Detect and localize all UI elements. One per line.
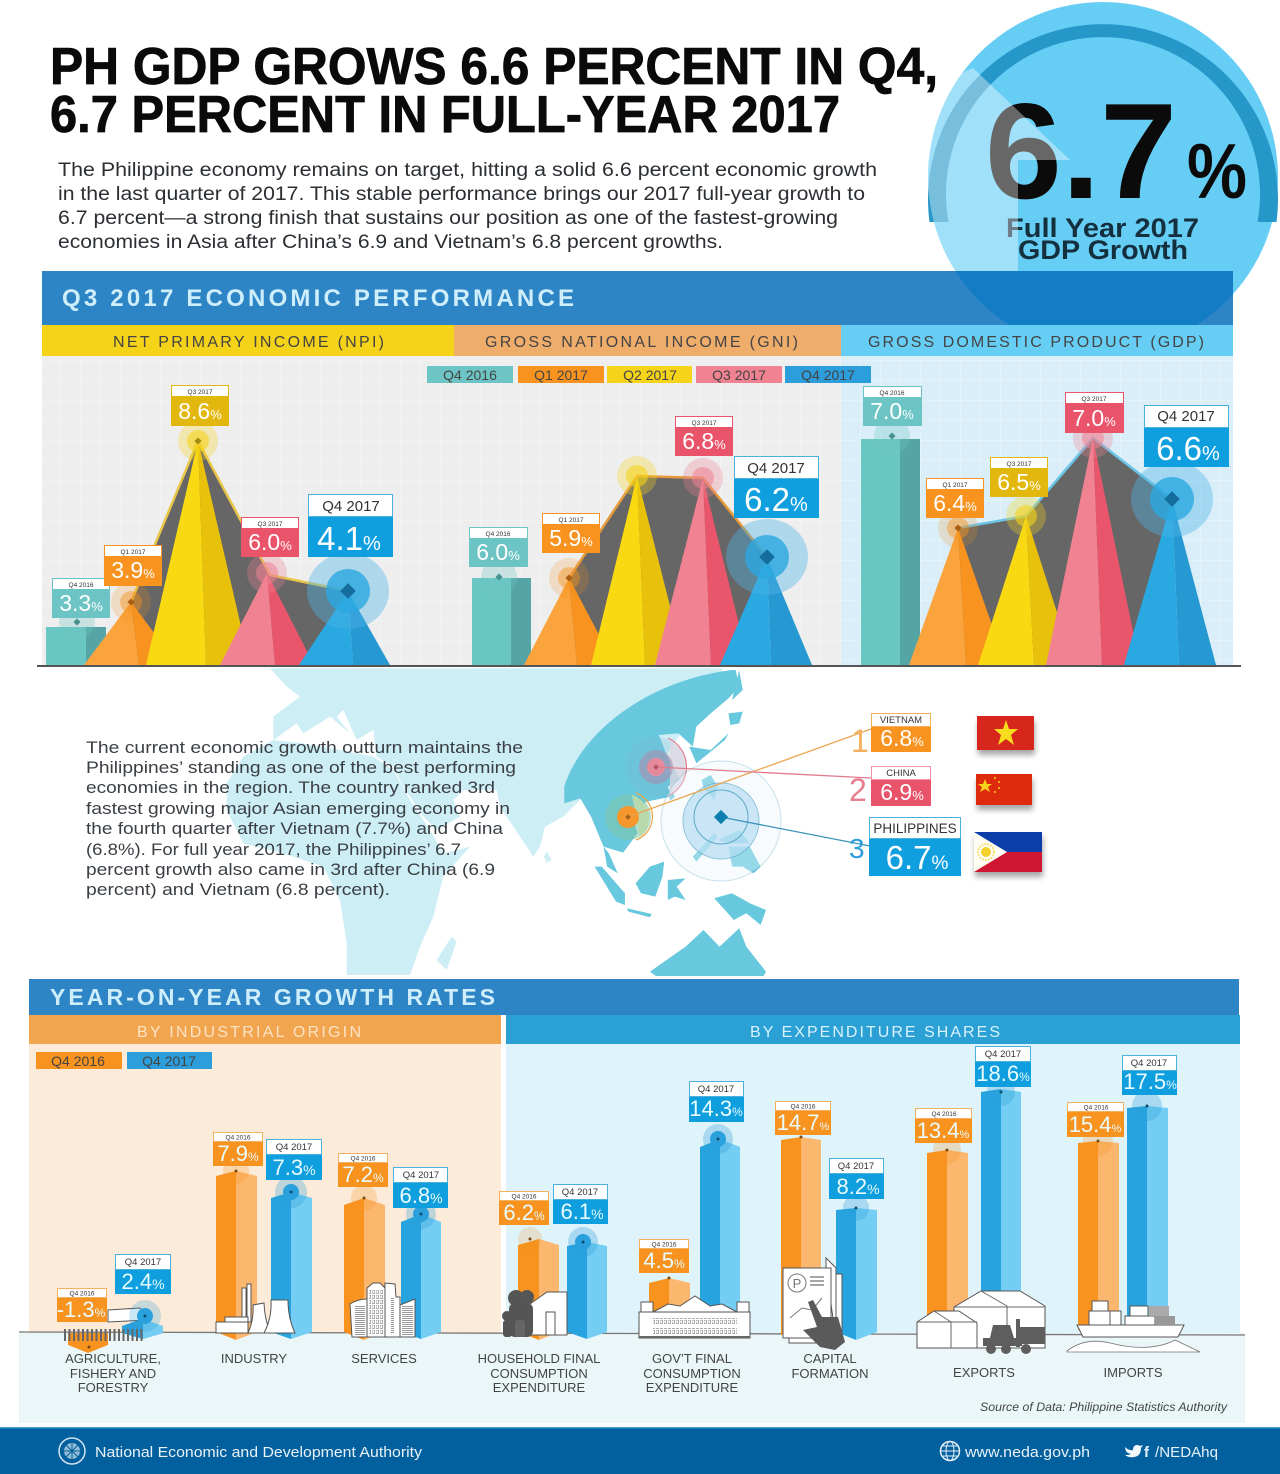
label: Q1 2017 6.4%: 6.4% [933,490,977,516]
legend: Q4 2016 [51,1053,105,1069]
label: 6.1%: 6.1% [560,1199,604,1224]
sub-header: by industrial origin [29,1015,501,1044]
group: services [338,1153,448,1366]
badge: 6.7% full year GDP growth: Full Year 2017 [1006,213,1199,243]
legend: quarters: Q2 2017 [623,367,677,383]
label: 4.5%: Q4 2016 [652,1242,677,1248]
category label: AGRICULTURE, [65,1351,161,1366]
section header: Q3 2017 economic performance: Q3 2017 ECONOMIC PERFORMANCE [62,285,574,312]
chart: NPI [46,385,393,665]
label: Q4 2017 6.6%: 6.6% [1156,430,1220,467]
text block: regional standing: (6.8%). For full year 2017, the Philippines’ 6.7 [86,840,461,859]
category label: SERVICES [351,1351,417,1366]
label: Q3 2017 6.8%: Q3 2017 [692,420,717,427]
badge: 6.7% full year GDP growth: GDP Growth [1018,235,1188,265]
footer: /NEDAhq [1155,1444,1218,1461]
sub-headers: GROSS DOMESTIC PRODUCT (GDP) [868,334,1204,351]
label: 14.7%: Q4 2016 [791,1104,816,1110]
ranking: Vietnam: 6.8% [880,725,924,751]
label: Q3 2017 6.5% [990,457,1048,497]
intro text block: in the last quarter of 2017. This stable performance brings our 2017 full-year growth to [58,184,865,205]
flag: Vietnam [977,716,1034,750]
label: Q4 2016 7.0%: 7.0% [870,398,914,424]
label: 17.5%: Q4 2017 [1131,1058,1167,1069]
label: Q3 2017 7.0%: Q3 2017 [1082,396,1107,403]
legend: quarters: Q4 2016 [443,367,497,383]
icon: twitter [1125,1445,1143,1457]
label: Q4 2016 3.3% [52,578,110,618]
group: capital formation [775,1101,884,1381]
label: Q3 2017 7.0%: 7.0% [1072,405,1116,431]
sub-headers: NET PRIMARY INCOME (NPI) [113,334,384,351]
label: Q1 2017 3.9%: 3.9% [111,557,155,583]
ranking: China [849,766,1032,808]
group: household final consumption [478,1184,608,1395]
label: 13.4%: Q4 2016 [932,1111,957,1118]
title: PH GDP GROWS 6.6 PERCENT IN Q4, [50,38,938,96]
legend [36,1052,212,1069]
footer: National Economic and Development Authority [95,1444,423,1461]
label: 14.7% [775,1101,831,1135]
label: Q4 2016 3.3%: 3.3% [59,590,103,616]
label: 7.9% [213,1132,263,1166]
footer: f [1144,1444,1150,1461]
label: Q4 2017 6.2% [734,456,819,518]
label: 6.2%: 6.2% [503,1200,545,1225]
text block: regional standing: The current economic growth outturn maintains the [86,738,523,757]
icon: cargo ship [1067,1301,1200,1352]
label: Q4 2016 7.0%: Q4 2016 [880,390,905,397]
label: Q1 2017 5.9%: 5.9% [549,525,593,551]
footer: www.neda.gov.ph [964,1444,1090,1461]
icon: warehouse and forklift [917,1291,1045,1354]
label: Q4 2016 7.0% [863,386,922,426]
label: Q3 2017 7.0% [1065,392,1124,433]
icon: office buildings [350,1283,415,1337]
section header: YEAR-ON-YEAR GROWTH RATES [50,984,495,1010]
label: 8.2%: 8.2% [836,1174,880,1199]
group: agriculture [57,1254,171,1395]
section header [29,979,1239,1015]
label: 2.4%: Q4 2017 [125,1257,161,1268]
category label: GOV’T FINAL [652,1351,732,1366]
label: Q3 2017 6.0% [241,517,299,557]
label: Q4 2017 4.1%: 4.1% [317,520,381,557]
icon: globe [940,1442,960,1460]
label: Q3 2017 8.6%: Q3 2017 [188,389,213,396]
label: 18.6%: 18.6% [976,1061,1030,1086]
label: Q4 2017 6.2%: Q4 2017 [747,460,805,477]
group: government final consumption [639,1081,750,1395]
label: Q4 2017 4.1% [308,494,393,557]
label: -1.3%: Q4 2016 [70,1290,95,1298]
category label: EXPENDITURE [646,1380,739,1395]
label: 15.4%: Q4 2016 [1084,1104,1109,1112]
icon: family and house [502,1290,567,1337]
icon: NEDA seal [59,1438,85,1464]
ranking: Vietnam: VIETNAM [880,715,922,726]
label: 7.3% [266,1139,322,1180]
label: 8.2%: Q4 2017 [838,1161,874,1172]
category label: EXPENDITURE [493,1380,586,1395]
label: Q3 2017 6.5%: Q3 2017 [1007,461,1032,468]
label: 14.3%: Q4 2017 [698,1084,734,1095]
badge: 6.7% full year GDP growth [928,2,1278,294]
sub-headers: GROSS NATIONAL INCOME (GNI) [485,334,798,351]
label: 7.3%: Q4 2017 [276,1142,312,1153]
label: 4.5%: 4.5% [643,1248,685,1273]
label: 7.2%: 7.2% [342,1162,384,1187]
label: 7.3%: 7.3% [272,1155,316,1180]
text block: regional standing: fastest growing major Asian emerging economy in [86,799,510,818]
group: exports [915,1046,1045,1380]
legend: quarters: Q3 2017 [712,367,766,383]
panel: year-on-year growth rates [19,979,1245,1423]
category label: CONSUMPTION [490,1366,588,1381]
category label: FORMATION [791,1366,869,1381]
text block: regional standing: Philippines’ standing as one of the best performing [86,758,516,777]
label: 6.8% [393,1167,448,1208]
label: Q1 2017 3.9%: Q1 2017 [121,549,146,556]
ranking: China: 6.9% [880,779,924,805]
label: 18.6%: Q4 2017 [985,1049,1021,1060]
label: 2.4% [115,1254,171,1294]
ranking: Philippines: 3 [849,833,865,864]
legend: quarters: Q1 2017 [534,367,588,383]
title: 6.7 PERCENT IN FULL-YEAR 2017 [50,86,840,144]
intro text block [58,160,877,253]
label: 4.5% [639,1239,689,1273]
label: 17.5% [1122,1055,1177,1095]
sub-header: by industrial origin: BY INDUSTRIAL ORIGIN [137,1024,361,1041]
ranking: Philippines [849,817,1042,876]
text block: regional standing [86,738,523,899]
badge: 6.7% full year GDP growth: % [1187,127,1247,215]
ranking: Vietnam: 1 [851,723,869,759]
label: 14.3%: 14.3% [689,1096,743,1121]
label: 8.2% [829,1158,884,1199]
chart: GNI [469,416,819,665]
label: Q1 2017 6.4%: Q1 2017 [943,482,968,489]
chart: GDP [861,386,1229,665]
sub-headers [42,325,1233,356]
section header: Q3 2017 economic performance [42,271,1233,325]
ranking: Vietnam [851,713,1034,759]
label: Q4 2016 6.0%: Q4 2016 [486,531,511,538]
label: Q1 2017 5.9%: Q1 2017 [559,517,584,524]
ranking: Philippines: PHILIPPINES [873,821,957,836]
source note: Source of Data: Philippine Statistics Authority [980,1402,1228,1414]
icon: document and hand [783,1258,845,1350]
flag: Philippines [974,832,1042,872]
label: 7.2% [338,1153,388,1187]
intro text block: 6.7 percent—a strong finish that sustains our position as one of the fastest-growing [58,208,838,229]
label: 6.8%: 6.8% [399,1183,443,1208]
text block: regional standing: the fourth quarter after Vietnam (7.7%) and China [86,819,504,838]
flag: China [976,774,1032,805]
label: Q4 2017 6.6%: Q4 2017 [1157,408,1215,425]
category label: CONSUMPTION [643,1366,741,1381]
ranking: China: CHINA [886,768,916,779]
label: 6.1% [553,1184,608,1224]
label: Q3 2017 8.6%: 8.6% [178,398,222,424]
label: -1.3%: -1.3% [57,1297,106,1322]
label: 17.5%: 17.5% [1123,1069,1177,1094]
ranking: Philippines: 6.7% [886,839,948,876]
legend: quarters [427,366,871,383]
label: Q4 2016 6.0%: 6.0% [476,539,520,565]
icon: factory [216,1284,295,1333]
label: Q3 2017 6.8% [675,416,733,456]
ranking: China: 2 [849,772,867,808]
label: Q1 2017 5.9% [542,513,600,553]
panel: net primary income, gross national income, gross domestic product charts [37,325,1241,667]
map: Asia region [227,668,766,978]
label: 15.4%: 15.4% [1069,1112,1122,1137]
category label: IMPORTS [1104,1365,1163,1380]
legend: quarters: Q4 2017 [801,367,855,383]
label: 14.3% [689,1081,744,1122]
label: Q4 2016 6.0% [469,527,528,567]
category label: EXPORTS [953,1365,1015,1380]
chart backgrounds [42,356,1233,665]
label: Q3 2017 8.6% [171,385,229,426]
badge: 6.7% full year GDP growth: 6.7 [985,75,1177,227]
label: 7.9%: 7.9% [217,1141,259,1166]
footer [0,1427,1280,1474]
group: imports [1067,1055,1200,1380]
icon: document and hand: P [793,1276,801,1291]
category label: FISHERY AND [70,1366,156,1381]
label: Q3 2017 6.0%: Q3 2017 [258,521,283,528]
label: 15.4% [1067,1102,1124,1137]
category label: HOUSEHOLD FINAL [478,1351,600,1366]
label: 13.4%: 13.4% [917,1118,970,1143]
sub-header: by expenditure shares: BY EXPENDITURE SHARES [750,1024,1000,1041]
intro text block: economies in Asia after China’s 6.9 and Vietnam’s 6.8 percent growths. [58,232,723,253]
label: Q4 2017 6.2%: 6.2% [744,481,808,518]
text block: regional standing: percent) and Vietnam (6.8 percent). [86,880,390,899]
text block: regional standing: percent growth also came in 3rd after China (6.9 [86,860,495,879]
label: Q1 2017 3.9% [104,545,162,586]
text block: regional standing: economies in the region. The country ranked 3rd [86,778,495,797]
label: 7.2%: Q4 2016 [351,1156,376,1162]
group: industry [213,1132,322,1366]
label: 6.8%: Q4 2017 [403,1170,439,1181]
label: 18.6% [975,1046,1031,1087]
label: 7.9%: Q4 2016 [226,1134,251,1142]
label: Q4 2017 4.1%: Q4 2017 [322,498,380,515]
category label: INDUSTRY [221,1351,287,1366]
label: 2.4%: 2.4% [121,1269,165,1294]
label: Q4 2016 3.3%: Q4 2016 [69,582,94,589]
legend: Q4 2017 [142,1053,196,1069]
label: Q3 2017 6.8%: 6.8% [682,428,726,454]
category label: CAPITAL [803,1351,857,1366]
label: Q1 2017 6.4% [926,478,984,518]
title [50,38,938,144]
intro text block: The Philippine economy remains on target, hitting a solid 6.6 percent economic growth [58,160,877,181]
map markers and connector lines [605,729,871,881]
label: 6.2% [499,1191,549,1225]
label: 14.7%: 14.7% [777,1110,830,1135]
label: Q4 2017 6.6% [1144,405,1229,467]
label: Q3 2017 6.5%: 6.5% [997,469,1041,495]
sub-header: by expenditure shares [506,1015,1240,1044]
label: 6.2%: Q4 2016 [512,1194,537,1200]
label: 13.4% [915,1108,972,1143]
icon: government building [639,1296,750,1338]
label: 6.1%: Q4 2017 [562,1187,598,1198]
category label: FORESTRY [78,1380,149,1395]
label: Q3 2017 6.0%: 6.0% [248,529,292,555]
